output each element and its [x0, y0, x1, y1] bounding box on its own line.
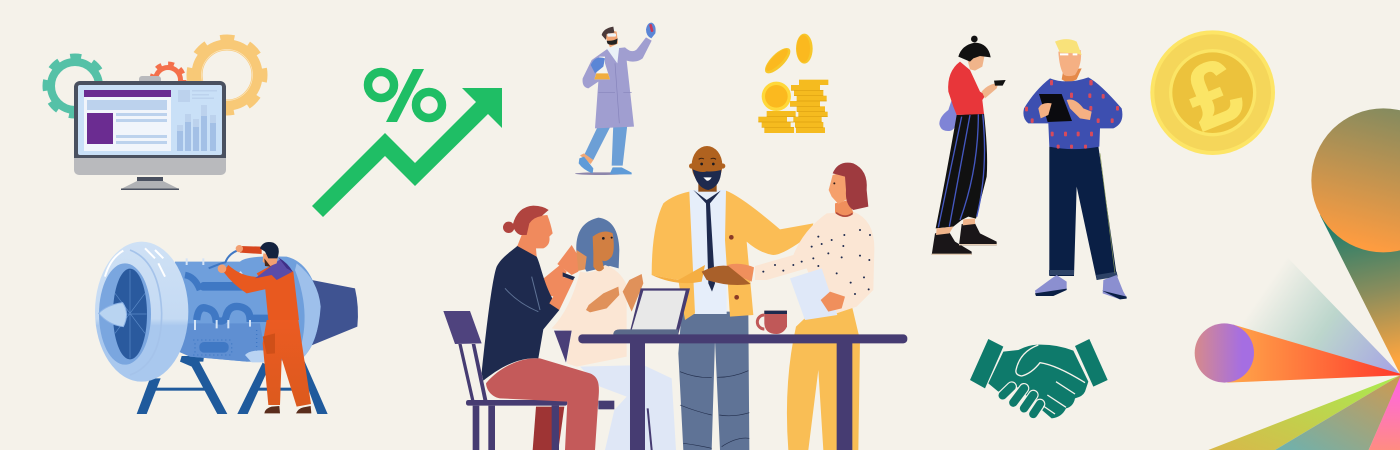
engine nozzle: [310, 280, 358, 346]
red top: [948, 62, 986, 115]
striped trousers: [936, 113, 987, 228]
ankles: [936, 218, 975, 235]
small purple circle: [1195, 323, 1254, 383]
arm and watch: [549, 277, 574, 310]
orange to red cone: [1227, 325, 1400, 383]
jumper: [1023, 77, 1122, 149]
arm and phone: [982, 83, 998, 98]
lime ray: [1208, 375, 1400, 450]
engine fan: [113, 269, 147, 359]
left coin stack: [758, 111, 796, 133]
hands: [586, 287, 619, 312]
icon: teal gear: [46, 56, 104, 116]
trousers: [678, 312, 749, 450]
shirt: [607, 46, 619, 63]
sweater torso: [482, 245, 559, 381]
two people using devices: [932, 36, 1127, 299]
jeans: [1049, 146, 1117, 280]
blouse: [755, 212, 874, 317]
icon: orange gear: [152, 64, 184, 96]
rear leg: [533, 407, 564, 450]
jet engine with mechanic: [95, 242, 358, 414]
coin body: [1150, 30, 1275, 155]
neck and head: [1062, 68, 1082, 83]
head: [967, 53, 985, 71]
tan to teal ray: [1275, 375, 1400, 450]
mechanic: [218, 242, 311, 413]
laptop: [613, 288, 690, 335]
beard: [693, 169, 721, 190]
paper: [790, 268, 837, 320]
chair leg over rear leg: [552, 406, 559, 450]
woman with phone: [932, 36, 1006, 255]
hair: [833, 163, 868, 210]
ground shadow: [575, 172, 625, 175]
falling coins: [761, 34, 813, 77]
tie: [693, 190, 721, 292]
lab coat: [583, 37, 652, 128]
icon: gears and computer monitor: [46, 38, 264, 190]
trousers: [580, 365, 676, 450]
pale lavender ray: [1233, 257, 1400, 374]
clasped hands: [988, 345, 1088, 418]
icon: rising green arrow with percent sign: [312, 69, 502, 217]
large coin: [762, 82, 791, 111]
teal to orange cone: [1320, 215, 1400, 374]
icon: monitor: [74, 76, 226, 190]
meeting group around a table: [443, 146, 907, 450]
head: [692, 146, 722, 185]
engine body: [175, 251, 321, 362]
arrow: [312, 88, 502, 217]
face: [593, 231, 614, 271]
hands: [1067, 99, 1092, 120]
shoes: [1035, 275, 1067, 296]
sweater: [552, 265, 627, 367]
pound symbol: £: [1172, 39, 1255, 149]
man with tablet: [1023, 39, 1127, 299]
tablet: [1039, 94, 1072, 122]
scientist: [575, 23, 656, 175]
head: [604, 31, 618, 47]
finger and thumb lines: [1016, 345, 1085, 414]
pink ray: [1369, 377, 1400, 450]
legs: [584, 123, 627, 166]
mechanic head: [263, 253, 278, 267]
standing man, bald with beard: [652, 146, 813, 450]
percent sign: [368, 69, 442, 122]
hair and bun: [513, 206, 549, 235]
seated woman chair back: [554, 331, 572, 363]
man with hair bun: [482, 206, 599, 450]
knuckles: [1003, 387, 1040, 414]
neck: [698, 182, 717, 192]
shoulder bag: [939, 100, 957, 131]
boots: [932, 231, 972, 255]
left chair: [443, 311, 653, 450]
mechanic shoes: [264, 406, 280, 413]
ears: [689, 163, 694, 169]
goggles: [607, 33, 616, 37]
right cuff: [1075, 339, 1108, 387]
handshake: [727, 264, 754, 282]
icon: gold coins: [758, 34, 828, 133]
trousers: [787, 305, 860, 450]
raised gloved hand with test tube: [646, 23, 656, 38]
cardigan: [652, 192, 695, 320]
shoes: [579, 157, 632, 174]
forearm raised clapping: [542, 265, 567, 297]
engine stands: [137, 356, 328, 414]
head: [829, 170, 852, 204]
flask with glove: [594, 57, 610, 79]
table: [578, 334, 907, 450]
icon: pound coin: [1150, 30, 1275, 155]
hair: [576, 218, 619, 272]
abstract gradient rays and spheres: [1195, 108, 1400, 450]
large orange circle: [1311, 108, 1400, 252]
shirt: [689, 190, 727, 314]
neck and necklace: [835, 200, 853, 216]
icon: teal handshake: [970, 339, 1108, 418]
coffee mug: [757, 311, 787, 334]
icon: yellow gear: [190, 38, 264, 112]
engine spinner: [99, 303, 127, 327]
head: [517, 215, 553, 257]
left cuff: [970, 339, 1003, 388]
seated woman with blue hair: [552, 218, 676, 450]
engine intake cowl: [95, 242, 188, 382]
woman in polka dot blouse: [755, 163, 874, 450]
coin face: [1171, 51, 1255, 135]
trousers: [486, 358, 599, 450]
hand holding paper: [821, 292, 845, 312]
right coin stack: [790, 80, 828, 133]
